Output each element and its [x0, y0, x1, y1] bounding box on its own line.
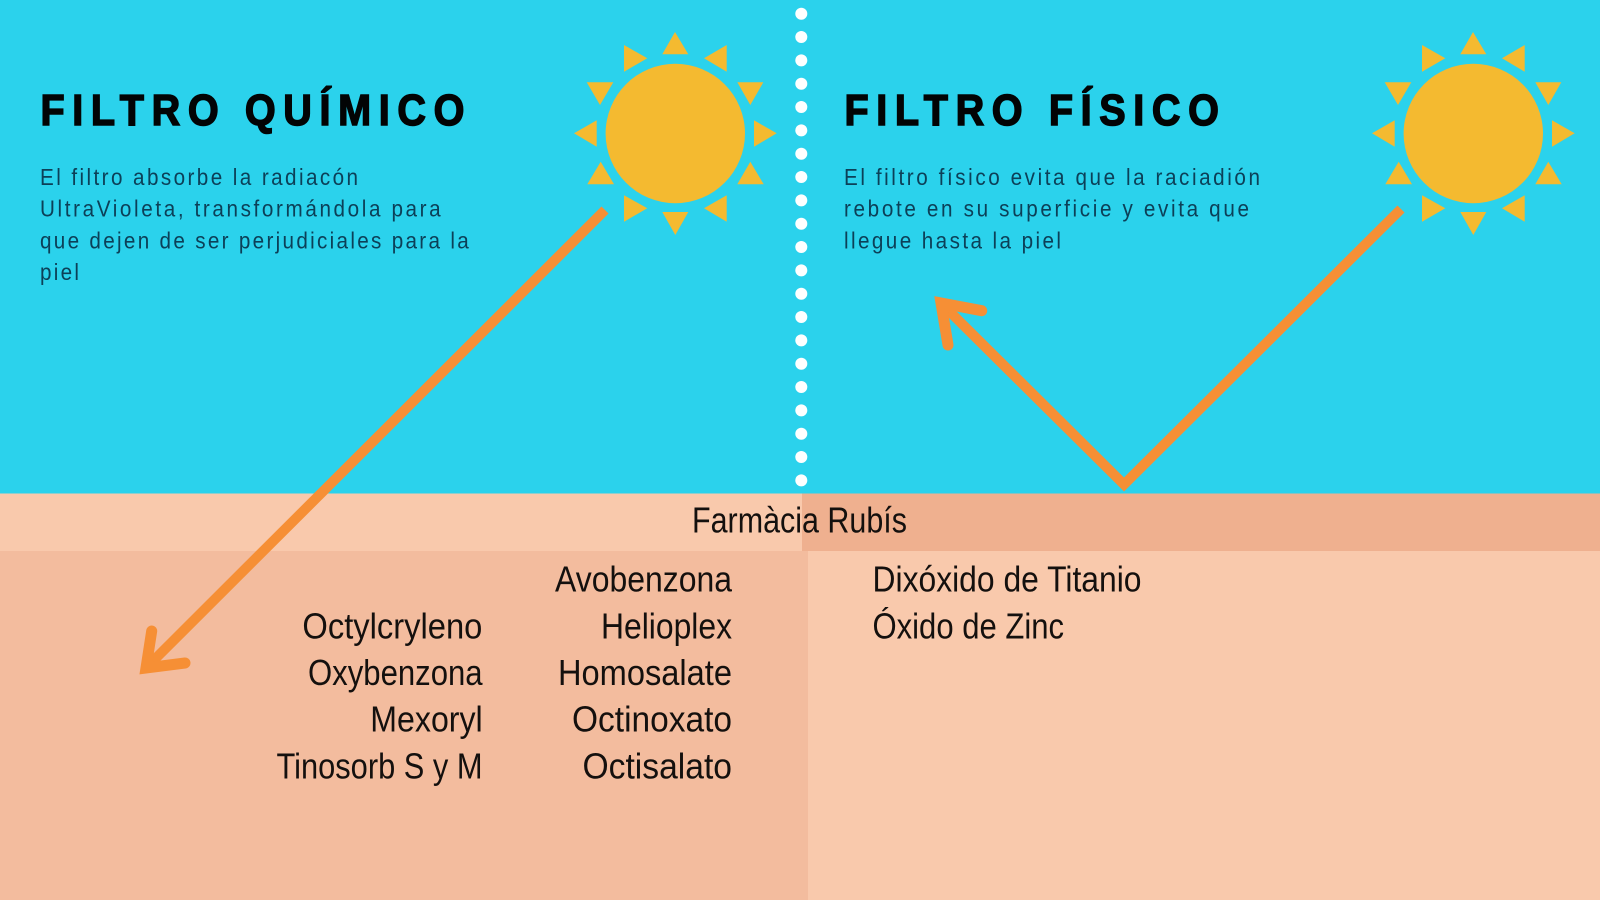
list: chemical filters column one — [276, 605, 483, 786]
text block: filtro químico description: El filtro absorbe la radiacón — [40, 164, 358, 190]
label: Farmàcia Rubís: Farmàcia Rubís — [692, 499, 907, 540]
text block: filtro químico description: piel — [40, 259, 79, 285]
panel: skin left lower — [0, 551, 808, 900]
arrow: absorbed ray passing into skin — [146, 210, 605, 668]
text block: filtro físico description: El filtro físico evita que la raciadión — [844, 164, 1260, 190]
list: physical filters: Dixóxido de Titanio — [872, 559, 1142, 600]
text block: filtro físico description — [844, 164, 1260, 254]
panel: sky background — [0, 0, 1600, 494]
list: physical filters — [872, 559, 1142, 646]
list: chemical filters column one: Mexoryl — [370, 699, 483, 740]
text block: filtro físico description: llegue hasta la piel — [844, 227, 1061, 254]
panel: skin surface band right — [802, 494, 1600, 551]
list: chemical filters column two — [555, 559, 733, 786]
icon: sun left — [574, 32, 777, 235]
text block: filtro químico description: UltraVioleta, transformándola para — [40, 195, 441, 222]
heading: filtro químico: FILTRO QUÍMICO — [40, 85, 464, 134]
list: chemical filters column two: Homosalate — [558, 652, 732, 693]
text block: filtro químico description — [40, 164, 469, 285]
panel: skin surface band left — [0, 494, 802, 551]
list: chemical filters column two: Octinoxato — [572, 699, 732, 740]
text block: filtro físico description: rebote en su superficie y evita que — [844, 195, 1249, 222]
list: chemical filters column one: Octylcryleno — [302, 605, 482, 646]
icon: sun right — [1372, 32, 1575, 235]
heading: filtro físico: FILTRO FÍSICO — [844, 85, 1219, 134]
list: chemical filters column two: Helioplex — [601, 605, 732, 646]
list: chemical filters column one: Tinosorb S y M — [276, 745, 482, 786]
list: chemical filters column two: Avobenzona — [555, 559, 733, 600]
dotted divider — [795, 8, 807, 486]
text block: filtro químico description: que dejen de ser perjudiciales para la — [40, 227, 469, 254]
list: chemical filters column one: Oxybenzona — [308, 652, 483, 693]
list: chemical filters column two: Octisalato — [582, 745, 732, 786]
arrow: ray reflected off skin — [941, 209, 1401, 484]
panel: skin right lower — [808, 551, 1600, 900]
list: physical filters: Óxido de Zinc — [872, 605, 1064, 646]
